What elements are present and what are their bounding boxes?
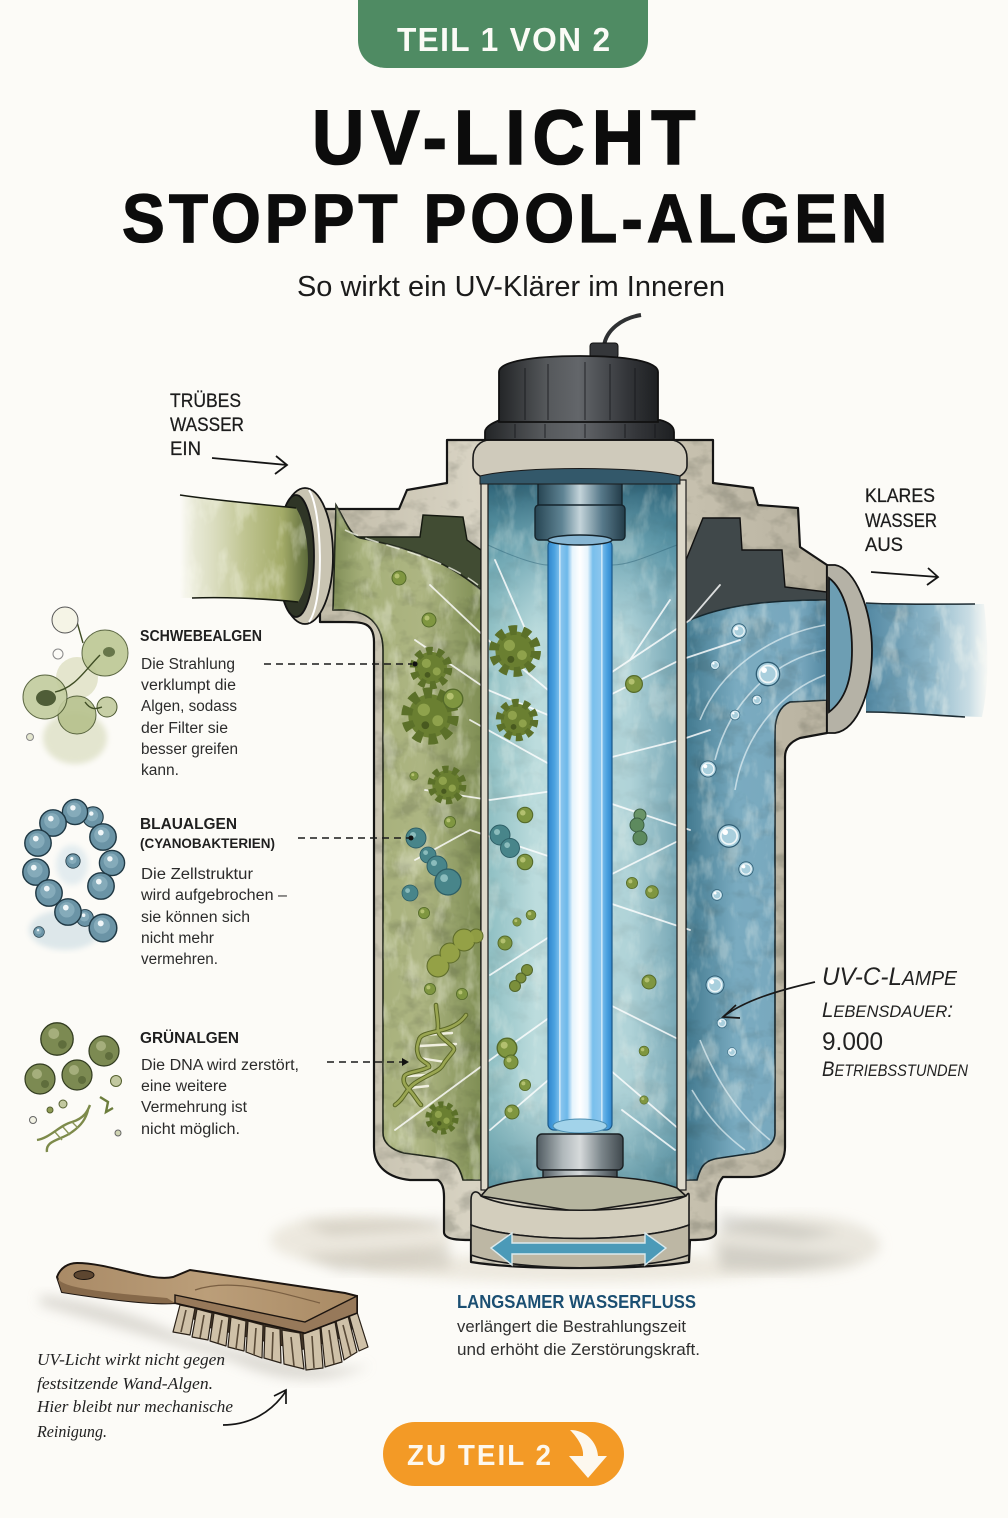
- stone housing shell: [320, 440, 827, 1268]
- outlet pipe: [866, 602, 986, 718]
- base floor and disc: [471, 1176, 689, 1268]
- title: [122, 94, 887, 258]
- blue water chamber: [686, 600, 831, 1185]
- dark cavity left: [357, 515, 481, 596]
- note: mechanical cleaning: Hier bleibt nur mechanische: [36, 1397, 233, 1416]
- stone texture: [320, 440, 830, 1270]
- DNA helix: [395, 1005, 466, 1105]
- button: zu Teil 2: [383, 1422, 624, 1486]
- text: Grünalgen: [140, 1030, 299, 1138]
- algae in central chamber: [490, 630, 658, 1119]
- text: Blaualgen: sie können sich: [141, 909, 250, 926]
- text: langsamer Wasserfluss: [457, 1292, 700, 1359]
- text: Grünalgen: GRÜNALGEN: [140, 1030, 239, 1047]
- icon: scrub brush: [40, 1263, 370, 1379]
- icon: Blaualgen: [23, 799, 125, 950]
- algae in left chamber: [392, 571, 483, 1132]
- ground shadow: [270, 1212, 880, 1282]
- badge: Teil 1 von 2: [358, 0, 648, 68]
- callout: UV-C-Lampe: UV-C-LAMPE: [822, 963, 958, 991]
- inlet pipe: [180, 490, 315, 605]
- text: Blaualgen: [140, 816, 287, 968]
- outlet flange: [827, 565, 872, 733]
- arrow: to brush: [223, 1390, 286, 1425]
- label: trübes Wasser ein: EIN: [170, 438, 201, 460]
- badge: Teil 1 von 2: TEIL 1 VON 2: [397, 21, 610, 58]
- top flange ring: [473, 440, 687, 484]
- text: Grünalgen: nicht möglich.: [141, 1121, 240, 1138]
- lamp top fitting: [535, 477, 625, 545]
- UV lamp tube: [548, 540, 612, 1133]
- text: Blaualgen: Die Zellstruktur: [141, 866, 253, 883]
- pointer: Schwebealgen: [264, 662, 418, 666]
- text: Grünalgen: Vermehrung ist: [141, 1099, 248, 1116]
- screw cap: [485, 356, 674, 440]
- text: Blaualgen: BLAUALGEN: [140, 816, 237, 833]
- text: langsamer Wasserfluss: LANGSAMER WASSERFLUSS: [457, 1292, 696, 1312]
- handle: [57, 1263, 357, 1333]
- icon: curved down arrow: [569, 1430, 607, 1478]
- note: mechanical cleaning: UV-Licht wirkt nicht gegen: [37, 1350, 225, 1369]
- note: mechanical cleaning: festsitzende Wand-Algen.: [37, 1374, 213, 1393]
- text: Blaualgen: nicht mehr: [141, 930, 214, 947]
- text: Schwebealgen: kann.: [141, 762, 179, 779]
- label: klares Wasser aus: AUS: [865, 534, 903, 556]
- callout: UV-C-Lampe: 9.000: [822, 1028, 883, 1056]
- bubbles in blue chamber: [700, 624, 780, 1056]
- text: langsamer Wasserfluss: und erhöht die Zerstörungskraft.: [457, 1341, 700, 1359]
- label: trübes Wasser ein: WASSER: [170, 414, 244, 436]
- UV rays: [395, 560, 740, 1150]
- label: klares Wasser aus: KLARES: [865, 485, 935, 507]
- green water chamber: [330, 500, 485, 1185]
- text: Schwebealgen: besser greifen: [141, 741, 238, 758]
- callout: UV-C-Lampe: LEBENSDAUER:: [822, 999, 953, 1022]
- callout: UV-C-Lampe: BETRIEBSSTUNDEN: [822, 1058, 968, 1081]
- inlet flange: [277, 488, 333, 624]
- note: mechanical cleaning: [36, 1350, 233, 1441]
- title: STOPPT POOL-ALGEN: [122, 181, 887, 258]
- text: Grünalgen: Die DNA wird zerstört,: [141, 1057, 299, 1074]
- label: trübes Wasser ein: [170, 390, 287, 474]
- UV clarifier cutaway: [180, 315, 990, 1270]
- central chamber: [488, 478, 677, 1190]
- icon: Schwebealgen: [23, 607, 128, 764]
- text: Schwebealgen: Die Strahlung: [141, 656, 235, 673]
- text: Schwebealgen: der Filter sie: [141, 720, 228, 737]
- text: Schwebealgen: verklumpt die: [141, 677, 236, 694]
- icon: Grünalgen: [25, 1023, 122, 1152]
- callout: UV-C-Lampe: [723, 963, 968, 1081]
- label: trübes Wasser ein: TRÜBES: [170, 390, 241, 412]
- inner wall left: [481, 480, 488, 1190]
- pointer: Blaualgen: [298, 836, 414, 840]
- flow arrow on base: [491, 1233, 666, 1265]
- text: langsamer Wasserfluss: verlängert die Bestrahlungszeit: [457, 1318, 686, 1336]
- title: UV-LICHT: [312, 94, 696, 180]
- text: Schwebealgen: [140, 628, 262, 779]
- text: Schwebealgen: SCHWEBEALGEN: [140, 628, 262, 645]
- text: Blaualgen: vermehren.: [141, 951, 218, 968]
- label: klares Wasser aus: WASSER: [865, 510, 937, 532]
- label: klares Wasser aus: [865, 485, 938, 585]
- text: Blaualgen: (CYANOBAKTERIEN): [140, 836, 275, 851]
- text: Schwebealgen: Algen, sodass: [141, 698, 237, 715]
- subtitle: So wirkt ein UV-Klärer im Inneren: [297, 271, 725, 303]
- lamp bottom fitting: [537, 1134, 623, 1200]
- text: Grünalgen: eine weitere: [141, 1078, 227, 1095]
- bristles: [173, 1303, 368, 1370]
- button: zu Teil 2: ZU TEIL 2: [407, 1439, 551, 1472]
- power cable: [590, 315, 641, 358]
- note: mechanical cleaning: Reinigung.: [36, 1422, 107, 1441]
- text: Blaualgen: wird aufgebrochen –: [140, 887, 287, 904]
- pointer: Grünalgen: [327, 1058, 409, 1066]
- dark cavity right: [686, 518, 827, 625]
- inner wall right: [677, 480, 686, 1190]
